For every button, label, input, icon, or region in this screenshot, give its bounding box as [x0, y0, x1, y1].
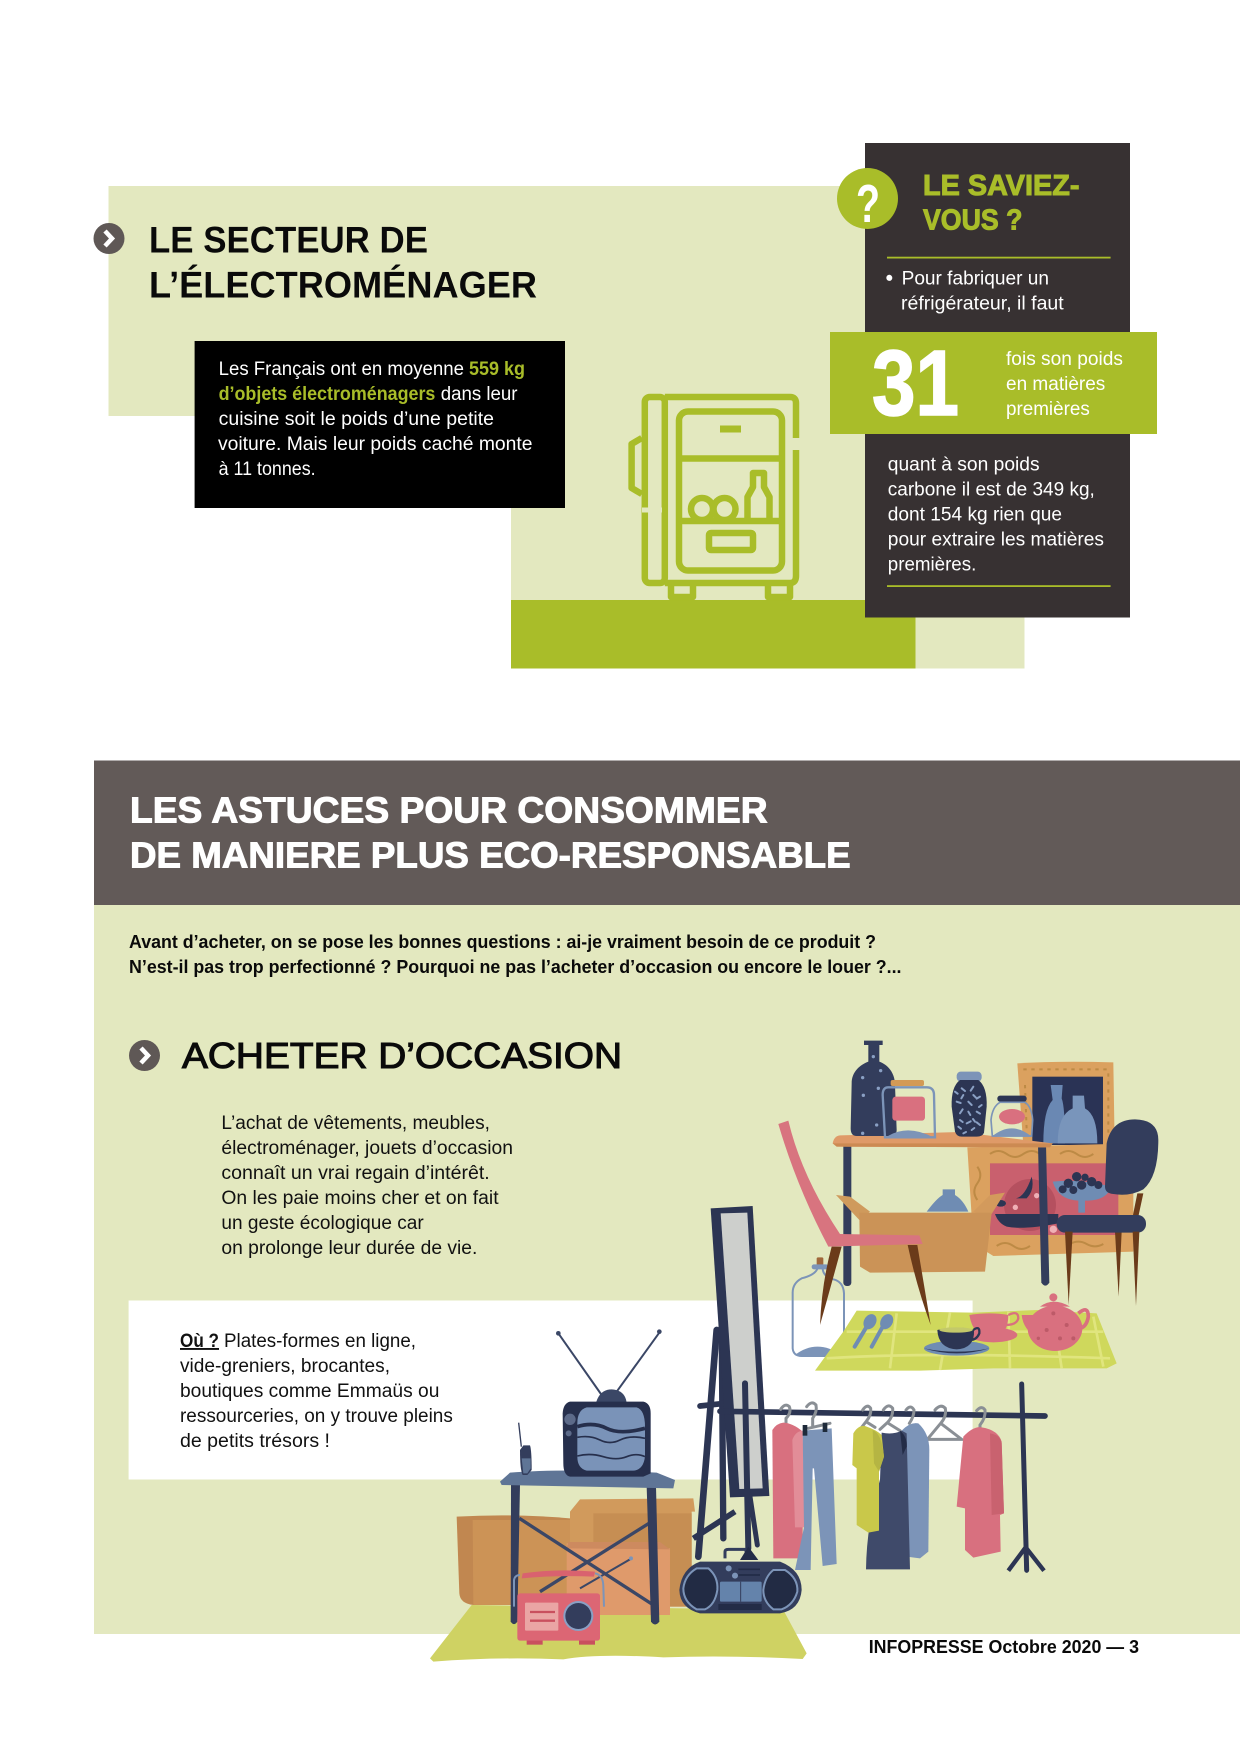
panel: où acheter: ressourceries, on y trouve pleins — [180, 1406, 453, 1427]
text: poids carbone: dont 154 kg rien que — [888, 504, 1062, 525]
illustration: rug and boxes — [430, 1498, 807, 1662]
pink chair — [778, 1121, 923, 1247]
glass bottle — [793, 1257, 844, 1356]
text: poids carbone: premières. — [888, 554, 976, 575]
text: achat d'occasion: on prolonge leur durée de vie. — [221, 1238, 477, 1259]
heading: le secteur de l'électroménager: L’ÉLECTROMÉNAGER — [149, 265, 537, 306]
stat band: 31 fois son poids: en matières — [1006, 374, 1105, 395]
stat band: 31 fois son poids: 31 — [872, 331, 959, 435]
stat band: 31 fois son poids: fois son poids — [1006, 349, 1123, 370]
shelf table — [833, 1132, 1053, 1286]
telephone — [519, 1423, 532, 1475]
heading: le saviez-vous: VOUS ? — [923, 205, 1022, 237]
text: achat d'occasion — [221, 1113, 513, 1259]
callout: black text box: cuisine soit le poids d’une petite — [219, 409, 494, 430]
illustration: furniture and objects upper — [778, 1041, 1158, 1356]
text: achat d'occasion: connaît un vrai regain d’intérêt. — [221, 1163, 490, 1184]
illustration: table with tv — [500, 1329, 802, 1645]
intro text: Avant d’acheter, on se pose les bonnes questions : ai-je vraiment besoin de ce produit ? — [129, 931, 876, 952]
text: achat d'occasion: électroménager, jouets d’occasion — [221, 1138, 513, 1159]
panel: astuces background — [94, 905, 1240, 1634]
intro text: N’est-il pas trop perfectionné ? Pourquoi ne pas l’acheter d’occasion ou encore le louer ?... — [129, 956, 902, 977]
panel: où acheter — [129, 1300, 973, 1480]
panel: où acheter: Plates-formes en ligne, — [224, 1331, 416, 1352]
callout: black text box: voiture. Mais leur poids caché monte — [218, 434, 532, 455]
panel: où acheter: boutiques comme Emmaüs ou — [180, 1381, 439, 1402]
text: pour fabriquer: Pour fabriquer un — [902, 268, 1049, 289]
text: poids carbone: carbone il est de 349 kg, — [888, 479, 1095, 500]
text: poids carbone: pour extraire les matières — [888, 529, 1104, 550]
header band: les astuces: DE MANIERE PLUS ECO-RESPONSABLE — [130, 834, 851, 875]
text: pour fabriquer: • — [886, 268, 893, 289]
icon: fridge — [632, 397, 796, 597]
header band: les astuces — [94, 760, 1240, 905]
callout: black text box: dans leur — [441, 384, 518, 405]
intro text — [129, 931, 902, 977]
stat band: 31 fois son poids — [830, 331, 1157, 435]
text: pour fabriquer — [886, 268, 1064, 314]
callout: black text box: Les Français ont en moyenne — [219, 359, 464, 380]
lower frame painting — [967, 1144, 1133, 1256]
table — [500, 1470, 675, 1624]
illustration: chair legs over rug — [820, 1232, 1139, 1325]
radio — [514, 1556, 633, 1645]
text: pour fabriquer: réfrigérateur, il faut — [901, 293, 1064, 314]
panel: le saviez-vous — [830, 143, 1157, 618]
icon: question mark: ? — [856, 174, 880, 234]
text: achat d'occasion: On les paie moins cher et on fait — [221, 1188, 499, 1209]
hangers — [781, 1403, 985, 1439]
heading: le secteur de l'électroménager — [94, 220, 537, 306]
panel: où acheter: Où ? — [180, 1331, 219, 1352]
boombox — [679, 1547, 802, 1613]
rack frame — [720, 1384, 1045, 1571]
callout: black text box — [195, 341, 565, 508]
panel: où acheter: de petits trésors ! — [180, 1431, 330, 1452]
bottle and jars — [851, 1041, 1033, 1137]
text: poids carbone — [888, 454, 1104, 575]
television — [556, 1329, 662, 1477]
heading: acheter d'occasion: ACHETER D’OCCASION — [182, 1035, 622, 1076]
panel: où acheter: vide-greniers, brocantes, — [180, 1356, 390, 1377]
callout: black text box: 559 kg — [469, 359, 525, 380]
footer: page credit: INFOPRESSE Octobre 2020 — 3 — [869, 1636, 1139, 1657]
navy chair with fruit bowl — [1053, 1119, 1158, 1297]
callout: black text box: d’objets électroménagers — [219, 384, 435, 405]
heading: le saviez-vous — [923, 170, 1080, 237]
text: achat d'occasion: L’achat de vêtements, meubles, — [221, 1113, 490, 1134]
icon: chevron bullet — [129, 1040, 160, 1071]
illustration: clothes rack — [720, 1384, 1045, 1571]
clothes — [772, 1423, 803, 1558]
picture frame with vases — [1017, 1062, 1115, 1145]
icon: question mark — [837, 168, 898, 234]
cardboard box — [836, 1189, 1005, 1273]
callout: black text box: à 11 tonnes. — [219, 459, 316, 480]
text: achat d'occasion: un geste écologique car — [221, 1213, 424, 1234]
background shapes: top section — [108, 186, 1024, 668]
illustration: mirror — [693, 1206, 769, 1557]
header band: les astuces: LES ASTUCES POUR CONSOMMER — [130, 790, 768, 831]
icon: chevron bullet — [94, 223, 124, 254]
illustration: table rug with tea set — [815, 1293, 1117, 1371]
heading: le saviez-vous: LE SAVIEZ- — [923, 170, 1080, 202]
heading: le secteur de l'électroménager: LE SECTEUR DE — [149, 220, 428, 261]
text: poids carbone: quant à son poids — [888, 454, 1040, 475]
stat band: 31 fois son poids: premières — [1006, 399, 1090, 420]
